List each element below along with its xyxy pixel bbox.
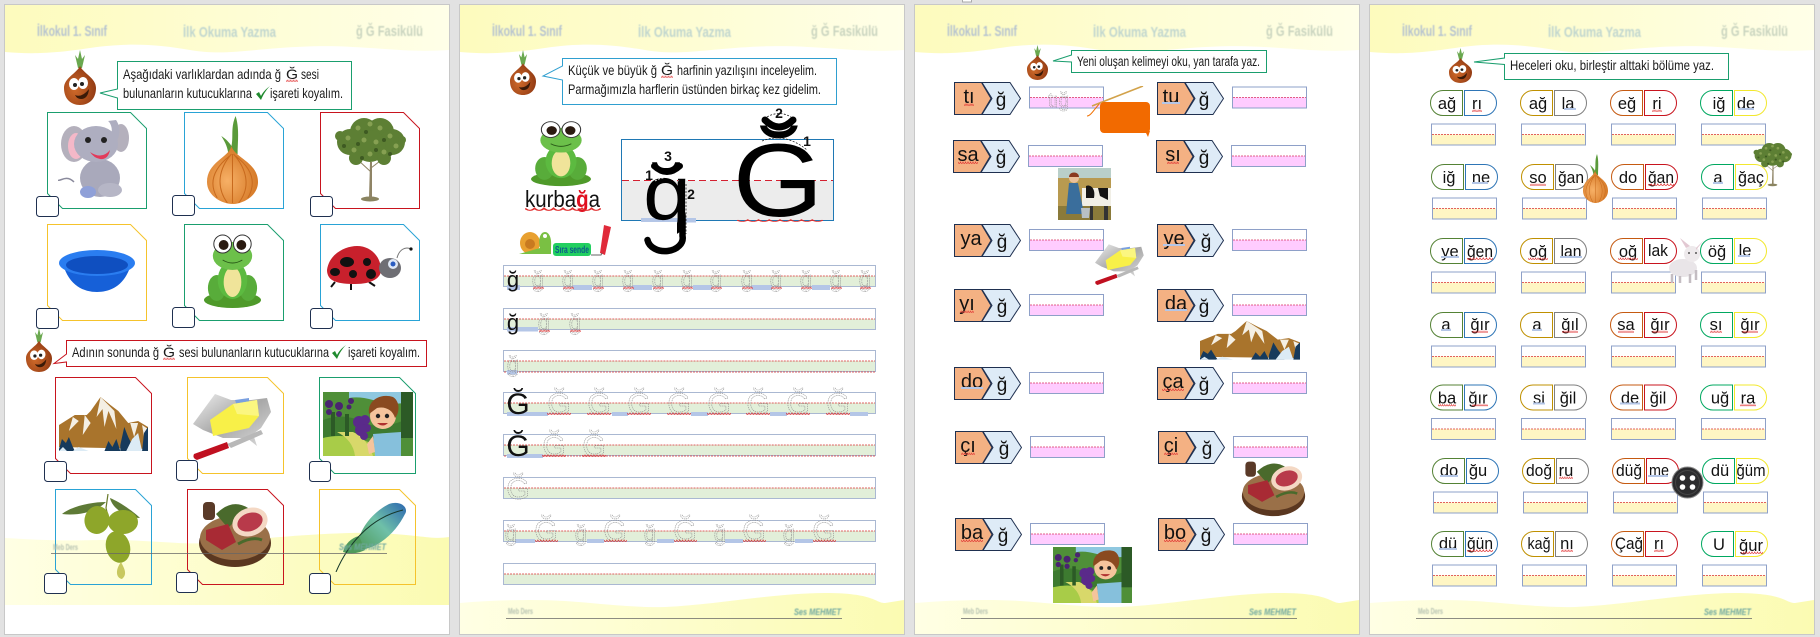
pill: düğ me: me: [1649, 462, 1669, 480]
writing line 1: ğ: [710, 267, 722, 292]
header band: [1370, 5, 1814, 53]
pill: sa ğır: sa: [1617, 316, 1636, 334]
pill: si ğil: [1520, 385, 1586, 440]
writing line 6: [504, 473, 875, 506]
letter guide box: [622, 140, 834, 222]
word builder: yı ğ: [954, 290, 1104, 322]
callout: letter instruction: harfinin yazılışını inceleyelim.: [677, 62, 817, 78]
callout: instruction one: işareti koyalım.: [270, 85, 343, 101]
picture: mountain: [1200, 321, 1300, 360]
writing line 8: [504, 564, 875, 584]
large letter: lowercase ğ: 1: [645, 167, 653, 183]
badge: sıra sende: Sıra sende: [555, 245, 589, 256]
word builder: yı ğ: yı: [959, 293, 975, 315]
word builder: sa ğ: [954, 140, 1102, 172]
callout: read and write: Yeni oluşan kelimeyi oku, yan tarafa yaz.: [1077, 53, 1260, 69]
pill: oğ lan: lan: [1560, 243, 1582, 261]
writing line 5: [504, 430, 875, 463]
pill: Çağ rı: rı: [1654, 535, 1664, 553]
word builder: çı ğ: [956, 432, 1104, 464]
writing line 1: ğ: [830, 267, 842, 292]
pill: oğ lak: oğ: [1619, 243, 1637, 261]
header band: ğ Ğ Fasikülü: [1266, 22, 1333, 40]
header band: İlkokul 1. Sınıf: [1402, 23, 1473, 40]
pill: ye ğen: [1430, 238, 1496, 293]
writing line 1: ğ: [770, 267, 782, 292]
panel: page 4 syllable pills: [1370, 4, 1814, 634]
word builder: sa ğ: sa: [957, 144, 979, 166]
mascot onion small: [26, 328, 52, 372]
pill: uğ ra: ra: [1741, 390, 1756, 408]
mascot onion: [1449, 48, 1472, 83]
picture: meat: [1242, 462, 1306, 516]
callout: instruction one: Aşağıdaki varlıklardan adında ğ: [123, 66, 281, 82]
word builder: tı ğ: tı: [963, 86, 975, 108]
pill: oğ lak: lak: [1648, 242, 1669, 260]
word builder: tı ğ: [954, 82, 1104, 114]
writing line 7: ğ: [783, 521, 795, 546]
writing line 4: Ğ: [506, 388, 530, 421]
writing line 4: Ğ: [826, 388, 850, 421]
large letter: lowercase ğ: 3: [664, 148, 672, 164]
pill: so ğan: ğan: [1558, 169, 1584, 187]
pill: iğ de: iğ: [1713, 95, 1725, 113]
writing line 4: Ğ: [587, 388, 611, 421]
word builder: sa ğ: ğ: [996, 148, 1006, 169]
word builder: ba ğ: ba: [961, 522, 984, 544]
callout: syllable instruction: Heceleri oku, birleştir alttaki bölüme yaz.: [1510, 57, 1714, 73]
footer band: Meb Ders: [508, 607, 533, 616]
writing line 2: ğ: [569, 310, 581, 335]
panel: page 1 find the sound: [4, 4, 450, 634]
word builder: çı ğ: çı: [960, 435, 976, 457]
footer band: [1370, 593, 1814, 634]
pill: kağ nı: nı: [1560, 535, 1574, 553]
writing line 5: Ğ: [506, 430, 530, 463]
footer band: [915, 593, 1359, 634]
word builder: çi ğ: [1158, 432, 1308, 464]
pill: ba ğır: [1430, 385, 1496, 440]
word builder: çi ğ: ğ: [1202, 439, 1212, 460]
pill: de ğil: [1610, 385, 1676, 440]
pill: oğ lak: [1610, 238, 1676, 293]
footer band: [460, 593, 904, 634]
callout: letter instruction: Ğ: [661, 62, 673, 78]
pill: a ğıl: [1520, 312, 1586, 367]
large letter: lowercase ğ: 2: [687, 186, 695, 202]
word: kurbağa: kurbağa: [525, 186, 600, 212]
writing line 4: Ğ: [667, 388, 691, 421]
card: frog: [172, 224, 284, 328]
callout: instruction one: Ğ: [286, 66, 298, 82]
pill: öğ le: [1700, 238, 1766, 293]
word builder: sı ğ: [1156, 140, 1306, 172]
card: meat: [176, 490, 284, 592]
pill: ağ la: [1520, 90, 1586, 145]
pill: sa ğır: [1610, 312, 1676, 367]
word builder: ça ğ: ça: [1162, 371, 1184, 393]
word builder: sı ğ: sı: [1165, 144, 1181, 166]
word builder: çi ğ: çi: [1164, 435, 1178, 457]
writing line 7: ğ: [505, 521, 517, 546]
card: vineyard boy: [310, 378, 416, 482]
writing line 7: ğ: [714, 521, 726, 546]
pill: uğ ra: [1700, 385, 1766, 440]
writing line 4: Ğ: [547, 388, 571, 421]
pill: eğ ri: [1610, 90, 1676, 145]
writing line 4: [504, 388, 875, 421]
writing line 7: ğ: [644, 521, 656, 546]
header band: İlkokul 1. Sınıf: [492, 23, 563, 40]
large letter: uppercase Ğ: Ğ: [733, 123, 823, 239]
word builder: bo ğ: bo: [1164, 522, 1186, 544]
pill: eğ ri: eğ: [1618, 95, 1636, 113]
writing line 1: ğ: [681, 267, 693, 292]
large letter: uppercase Ğ: 1: [803, 133, 811, 149]
word builder: bo ğ: ğ: [1201, 526, 1211, 547]
writing line 7: Ğ: [603, 515, 627, 548]
pill: ağ rı: rı: [1472, 95, 1482, 113]
card: mountain: [44, 378, 152, 482]
pill: dü ğün: [1432, 532, 1498, 586]
card: tree: [310, 112, 420, 216]
word builder: ya ğ: ya: [960, 228, 982, 250]
writing line 1: ğ: [652, 267, 664, 292]
writing line 4: Ğ: [627, 388, 651, 421]
icon: shirt button: [1672, 467, 1703, 498]
badge: sıra sende: [553, 243, 591, 256]
pill: dü ğüm: dü: [1711, 462, 1729, 480]
pill: iğ ne: [1432, 164, 1498, 219]
pill: a ğır: ğır: [1470, 316, 1490, 334]
picture: butter: [1095, 244, 1144, 285]
pill: kağ nı: [1522, 532, 1588, 586]
writing line 7: Ğ: [534, 515, 558, 548]
pill: ye ğen: ğen: [1467, 243, 1493, 261]
writing line 6: Ğ: [506, 473, 530, 506]
panel: page 2 letter writing: [460, 4, 904, 634]
pill: ağ rı: ağ: [1438, 95, 1456, 113]
large letter: uppercase Ğ: 2: [775, 105, 783, 121]
header band: İlk Okuma Yazma: [1093, 24, 1186, 41]
footer band: Meb Ders: [1418, 607, 1443, 616]
callout: read and write: [1053, 50, 1266, 72]
writing line 1: ğ: [741, 267, 753, 292]
pill: a ğaç: a: [1713, 169, 1723, 187]
pill: do ğan: ğan: [1648, 169, 1674, 187]
pill: düğ me: [1612, 458, 1678, 513]
writing line 1: ğ: [532, 267, 544, 292]
card: feather: [310, 490, 416, 594]
pill: ye ğen: ye: [1441, 243, 1459, 261]
pill: sa ğır: ğır: [1650, 316, 1670, 334]
pill: sı ğır: sı: [1710, 316, 1722, 334]
card: ladybug: [310, 224, 420, 328]
header band: İlk Okuma Yazma: [1548, 24, 1641, 41]
writing line 1: ğ: [562, 267, 574, 292]
pill: öğ le: öğ: [1708, 243, 1726, 261]
callout: instruction one: sesi: [301, 66, 319, 82]
footer band: Meb Ders: [963, 607, 988, 616]
icon: frog: [531, 122, 591, 186]
pill: oğ lan: oğ: [1529, 243, 1547, 261]
header band: [5, 5, 449, 53]
card: elephant: [36, 112, 146, 216]
callout: instruction one: bulunanların kutucuklarına: [123, 85, 252, 101]
word builder: da ğ: ğ: [1199, 297, 1209, 318]
word builder: ba ğ: [956, 518, 1104, 550]
pill: iğ de: [1700, 90, 1766, 145]
footer band: [5, 533, 449, 605]
pill: düğ me: düğ: [1616, 462, 1642, 480]
mascot onion: [64, 50, 96, 105]
word builder: ya ğ: ğ: [997, 232, 1007, 253]
word builder: ba ğ: ğ: [998, 526, 1008, 547]
pill: a ğıl: ğıl: [1561, 316, 1579, 334]
word builder: ya ğ: [954, 224, 1104, 256]
pill: dü ğüm: [1702, 458, 1768, 513]
pill: eğ ri: ri: [1652, 95, 1662, 113]
callout: letter instruction: Parmağımızla harflerin üstünden birkaç kez gidelim.: [568, 81, 821, 97]
writing line 7: Ğ: [742, 515, 766, 548]
card: butter: [176, 378, 284, 480]
word builder: yı ğ: ğ: [997, 297, 1007, 318]
picture: crochet: [1087, 86, 1150, 137]
pill: so ğan: so: [1529, 169, 1547, 187]
footer band: Ses MEHMET: [1704, 607, 1752, 617]
callout: instruction two: Ğ: [163, 344, 175, 360]
writing line 7: Ğ: [812, 515, 836, 548]
writing line 1: ğ: [592, 267, 604, 292]
pill: do ğan: do: [1619, 169, 1637, 187]
writing line 7: [504, 515, 875, 548]
pill: ağ la: ağ: [1529, 95, 1547, 113]
pill: sı ğır: [1700, 312, 1766, 367]
pill: doğ ru: [1522, 458, 1588, 513]
word builder: sı ğ: ğ: [1199, 148, 1209, 169]
word builder: do ğ: do: [961, 371, 983, 393]
word builder: bo ğ: [1158, 518, 1308, 550]
pill: ağ la: la: [1562, 95, 1575, 113]
word builder: tu ğ: ğ: [1199, 90, 1209, 111]
writing line 1: ğ: [800, 267, 812, 292]
word builder: do ğ: [954, 368, 1104, 400]
card: basin: [36, 224, 146, 328]
writing line 1: [504, 266, 875, 292]
pill: do ğu: do: [1440, 462, 1458, 480]
large letter: lowercase ğ: ğ: [643, 151, 691, 237]
footer label: Meb Ders: [53, 543, 78, 552]
callout: syllable instruction: [1474, 54, 1728, 80]
pill: oğ lan: [1520, 238, 1586, 293]
footer band: Ses MEHMET: [794, 607, 842, 617]
header band: İlkokul 1. Sınıf: [37, 23, 108, 40]
footer band: Ses MEHMET: [1249, 607, 1297, 617]
writing line 2: ğ: [538, 310, 550, 335]
callout: letter instruction: Küçük ve büyük ğ: [568, 62, 657, 78]
pill: a ğır: [1430, 312, 1496, 367]
word builder: tı ğ: ğ: [996, 90, 1006, 111]
pill: iğ de: de: [1737, 95, 1755, 113]
pill: do ğu: ğu: [1469, 462, 1487, 480]
pill: kağ nı: kağ: [1528, 535, 1550, 553]
word builder: tu ğ: tu: [1163, 86, 1179, 108]
writing line 5: Ğ: [582, 430, 606, 463]
header band: İlk Okuma Yazma: [638, 24, 731, 41]
word builder: da ğ: da: [1165, 293, 1188, 315]
writing line 5: Ğ: [542, 430, 566, 463]
word builder: ye ğ: ye: [1163, 228, 1185, 250]
callout: instruction two: sesi bulunanların kutucuklarına: [179, 344, 329, 360]
pill: si ğil: ğil: [1560, 390, 1576, 408]
writing line 1: ğ: [622, 267, 634, 292]
pill: so ğan: [1522, 164, 1588, 219]
header band: [460, 5, 904, 53]
pill: sı ğır: ğır: [1740, 316, 1760, 334]
card: olive: [44, 490, 152, 594]
pill: dü ğün: ğün: [1467, 535, 1493, 553]
word builder: ça ğ: ğ: [1199, 375, 1209, 396]
callout: instruction two: [54, 340, 426, 366]
header band: ğ Ğ Fasikülü: [1721, 22, 1788, 40]
pill: do ğan: [1612, 164, 1678, 219]
callout: instruction two: Adının sonunda ğ: [72, 344, 159, 360]
writing line 2: [504, 308, 875, 335]
header band: İlkokul 1. Sınıf: [947, 23, 1018, 40]
picture: onion: [1583, 154, 1608, 203]
callout: instruction two: işareti koyalım.: [348, 344, 420, 360]
pill: iğ ne: ne: [1472, 169, 1490, 187]
pill: uğ ra: uğ: [1711, 390, 1729, 408]
word builder: ye ğ: [1158, 224, 1306, 256]
pill: a ğaç: [1702, 164, 1768, 219]
pill: Çağ rı: [1612, 532, 1678, 586]
pill: a ğaç: ğaç: [1738, 169, 1764, 187]
pill: ba ğır: ba: [1438, 390, 1457, 408]
pill: si ğil: si: [1533, 390, 1545, 408]
pill: dü ğün: dü: [1439, 535, 1457, 553]
writing line 1: ğ: [859, 267, 871, 292]
word builder: do ğ: ğ: [997, 375, 1007, 396]
footer label: [51, 542, 387, 554]
small toolbar marker: [962, 0, 972, 2]
writing line 4: Ğ: [786, 388, 810, 421]
pill: U ğur: [1702, 532, 1768, 586]
pill: a ğır: a: [1441, 316, 1451, 334]
pill: iğ ne: iğ: [1443, 169, 1455, 187]
pill: doğ ru: doğ: [1526, 462, 1552, 480]
pill: de ğil: de: [1621, 390, 1639, 408]
writing line 1: ğ: [507, 267, 519, 292]
pill: dü ğüm: ğüm: [1736, 462, 1766, 480]
header band: ğ Ğ Fasikülü: [356, 22, 423, 40]
icon: pencil: [591, 225, 611, 255]
writing line 7: Ğ: [673, 515, 697, 548]
word builder: tu ğ: [1158, 82, 1306, 114]
picture: vineyard boy: [1053, 547, 1132, 603]
header band: İlk Okuma Yazma: [183, 24, 276, 41]
pill: a ğıl: a: [1532, 316, 1542, 334]
word builder: tı ğ: tığ: [1048, 90, 1069, 112]
pill: do ğu: [1432, 458, 1498, 513]
pill: U ğur: ğur: [1739, 537, 1763, 555]
pill: de ğil: ğil: [1650, 390, 1666, 408]
pill: öğ le: le: [1739, 242, 1751, 260]
word builder: da ğ: [1158, 290, 1306, 322]
mascot onion: [510, 50, 536, 95]
word builder: ye ğ: ğ: [1201, 232, 1211, 253]
callout: letter instruction: [543, 58, 836, 104]
writing line 4: Ğ: [707, 388, 731, 421]
writing line 7: ğ: [575, 521, 587, 546]
picture: goat: [1669, 238, 1704, 283]
writing line 3: ğ: [507, 352, 519, 377]
pill: ağ rı: [1430, 90, 1496, 145]
mascot onion: [1027, 45, 1048, 80]
picture: tree: [1754, 143, 1792, 186]
writing line 3: [504, 350, 875, 377]
pill: ba ğır: ğır: [1468, 390, 1488, 408]
panel: page 3 syllable words: [914, 4, 1360, 634]
header band: ğ Ğ Fasikülü: [811, 22, 878, 40]
pill: Çağ rı: Çağ: [1615, 535, 1643, 553]
pill: doğ ru: ru: [1559, 462, 1573, 480]
pill: U ğur: U: [1713, 536, 1725, 554]
callout: instruction one: [100, 62, 352, 110]
icon: snail: [519, 232, 551, 254]
header band: [915, 5, 1359, 53]
writing line 4: Ğ: [746, 388, 770, 421]
footer label: Ses MEHMET: [339, 542, 387, 552]
writing line 2: ğ: [507, 310, 519, 335]
picture: milking girl: [1058, 168, 1111, 220]
card: onion: [172, 112, 284, 216]
word builder: çı ğ: ğ: [999, 439, 1009, 460]
word builder: ça ğ: [1158, 368, 1306, 400]
